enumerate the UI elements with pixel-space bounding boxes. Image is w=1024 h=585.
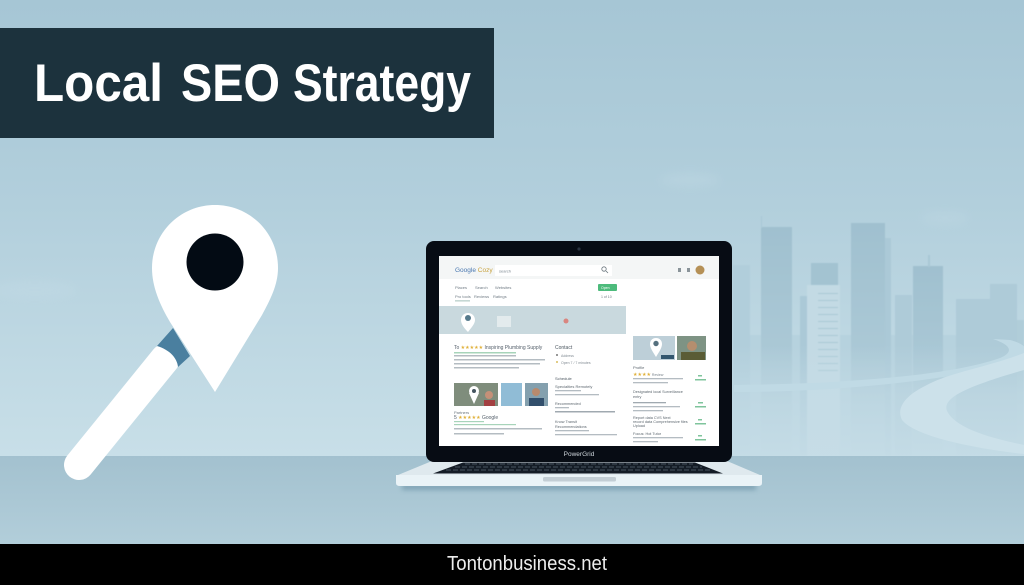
- search header: Google Cozy: [455, 267, 493, 274]
- laptop bezel: [426, 241, 732, 462]
- tabs: Reviews: [474, 294, 489, 299]
- keyboard: [433, 462, 723, 474]
- middle column: Address: [561, 354, 574, 358]
- middle column: Open 7 / 7 minutes: [561, 361, 591, 365]
- middle column: Specialties Remotely: [555, 384, 592, 389]
- tabs: Ratings: [493, 294, 507, 299]
- floor band: [0, 456, 1024, 544]
- pin body: [152, 205, 278, 392]
- screen content: [439, 256, 719, 442]
- title text: Local: [34, 54, 163, 113]
- laptop deck: [396, 475, 762, 486]
- right column: entry: [633, 395, 642, 399]
- right column: Report data CVS Next: [633, 416, 672, 420]
- title banner: [0, 28, 494, 138]
- laptop shadow: [402, 484, 756, 490]
- image row: [454, 383, 548, 406]
- footer text: Tontonbusiness.net: [447, 553, 607, 575]
- result one: [454, 345, 545, 368]
- search header: [439, 256, 719, 279]
- title text: Strategy: [293, 54, 471, 113]
- middle column: Schedule: [555, 376, 572, 381]
- screen: [439, 256, 719, 446]
- tabs: Places: [455, 285, 467, 290]
- bezel logo: PowerGrid: [564, 451, 595, 458]
- title text: SEO: [181, 54, 280, 113]
- result two: Partners: [454, 410, 469, 415]
- search header: search: [499, 268, 511, 274]
- background sky: [0, 0, 1024, 456]
- pin handle: [79, 359, 165, 465]
- base wedge: [398, 461, 760, 475]
- tabs: Websites: [495, 285, 511, 290]
- trackpad: [543, 477, 616, 482]
- right column: ★★★★ Review: [633, 372, 664, 378]
- elevated highway: [734, 339, 1024, 454]
- pin hole: [186, 234, 244, 290]
- right column: Focus: Hot Tutor: [633, 432, 662, 436]
- middle column: [555, 345, 617, 435]
- footer bar: [0, 544, 1024, 585]
- map strip: [439, 306, 626, 334]
- result two: 5 ★★★★★ Google: [454, 415, 498, 421]
- middle column: Know Transit: [555, 420, 578, 424]
- city haze: [733, 345, 1024, 456]
- pin collar: [157, 328, 190, 367]
- result two: [454, 410, 542, 434]
- title text: [34, 54, 471, 113]
- right column: [633, 336, 706, 442]
- middle column: Recommended: [555, 402, 581, 406]
- middle column: Recommendations: [555, 425, 587, 429]
- right column: record data Comprehensive files: [633, 420, 688, 424]
- laptop: [396, 241, 762, 486]
- middle column: Contact: [555, 345, 573, 351]
- tabs: 1 of 10: [601, 295, 612, 299]
- icon: location pin with handle: [79, 205, 278, 465]
- soft clouds: [0, 173, 969, 299]
- tabs: Pro tools: [455, 294, 471, 299]
- right column: Profile: [633, 365, 645, 370]
- tabs: Search: [475, 285, 488, 290]
- tabs: Open: [601, 286, 610, 290]
- right column: Designated local Surveillance: [633, 390, 683, 394]
- right column: Upload: [633, 424, 645, 428]
- tabs: [455, 284, 617, 301]
- city skyline: [733, 216, 1024, 456]
- result one: To ★★★★★ Inspiring Plumbing Supply: [454, 345, 543, 351]
